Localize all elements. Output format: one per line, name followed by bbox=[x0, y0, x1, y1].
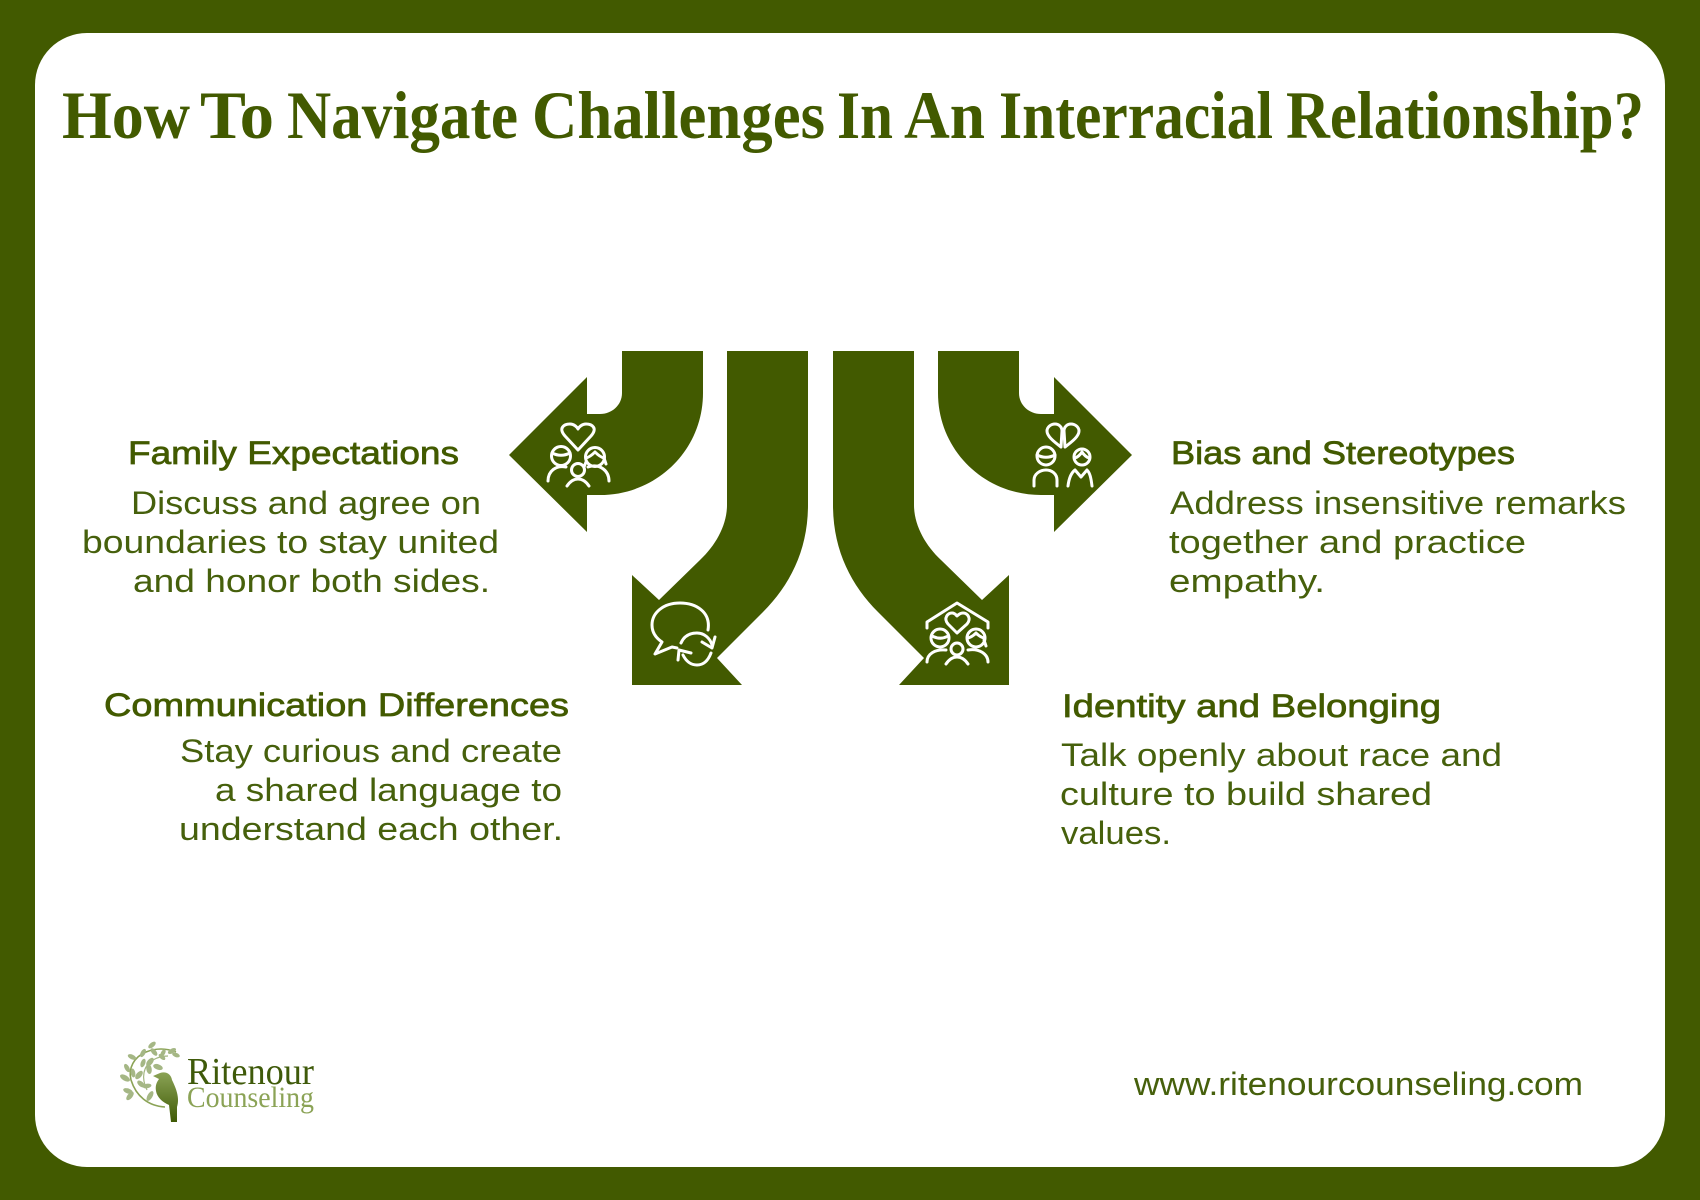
logo wordmark: Counseling bbox=[187, 1081, 314, 1114]
logo icon: bird on leafy branch bbox=[119, 1040, 180, 1122]
arrow: communication differences bbox=[632, 351, 808, 685]
text block: communication differences: understand each other. bbox=[179, 811, 563, 847]
text block: family expectations: and honor both sides. bbox=[133, 563, 490, 599]
icon: family with heart bbox=[548, 424, 609, 486]
text block: identity and belonging: Talk openly about race and bbox=[1061, 737, 1502, 773]
text block: identity and belonging bbox=[1060, 688, 1502, 851]
text block: communication differences bbox=[104, 687, 569, 847]
heading: bias and stereotypes: Bias and Stereotypes bbox=[1171, 435, 1515, 471]
title: Navigate bbox=[287, 77, 518, 153]
text block: bias and stereotypes: together and practice bbox=[1169, 524, 1526, 560]
diagram: four curved arrows bbox=[509, 351, 1132, 685]
title: How bbox=[62, 77, 190, 153]
title: Interracial bbox=[999, 77, 1273, 153]
text block: family expectations bbox=[82, 435, 499, 599]
logo: Ritenour Counseling bbox=[119, 1040, 314, 1122]
website url: www.ritenourcounseling.com bbox=[1133, 1066, 1583, 1102]
text block: family expectations: Discuss and agree on bbox=[131, 485, 481, 521]
text block: communication differences: Stay curious and create bbox=[180, 733, 562, 769]
text block: family expectations: boundaries to stay united bbox=[82, 524, 499, 560]
text block: identity and belonging: values. bbox=[1061, 815, 1171, 851]
title: Challenges bbox=[532, 77, 825, 153]
icon: couple with split heart bbox=[1034, 424, 1092, 486]
text block: communication differences: a shared language to bbox=[215, 772, 562, 808]
logo wordmark bbox=[187, 1051, 314, 1114]
title: Relationship? bbox=[1286, 77, 1644, 153]
icon: speech bubble with refresh arrows bbox=[652, 603, 715, 665]
arrow: bias and stereotypes bbox=[938, 351, 1132, 532]
text block: bias and stereotypes: empathy. bbox=[1169, 563, 1325, 599]
title: An bbox=[904, 77, 985, 153]
title: In bbox=[837, 77, 893, 153]
heading: identity and belonging: Identity and Belonging bbox=[1062, 688, 1441, 724]
text block: bias and stereotypes bbox=[1169, 435, 1626, 599]
arrow: family expectations bbox=[509, 351, 703, 532]
heading: family expectations: Family Expectations bbox=[128, 435, 459, 471]
heading: communication differences: Communication Differences bbox=[104, 687, 569, 723]
text block: bias and stereotypes: Address insensitive remarks bbox=[1170, 485, 1626, 521]
title: To bbox=[200, 77, 274, 153]
title bbox=[62, 77, 1644, 153]
logo wordmark: Ritenour bbox=[187, 1051, 314, 1093]
icon: family in house bbox=[927, 603, 988, 664]
arrow: identity and belonging bbox=[833, 351, 1009, 685]
text block: identity and belonging: culture to build shared bbox=[1060, 776, 1432, 812]
